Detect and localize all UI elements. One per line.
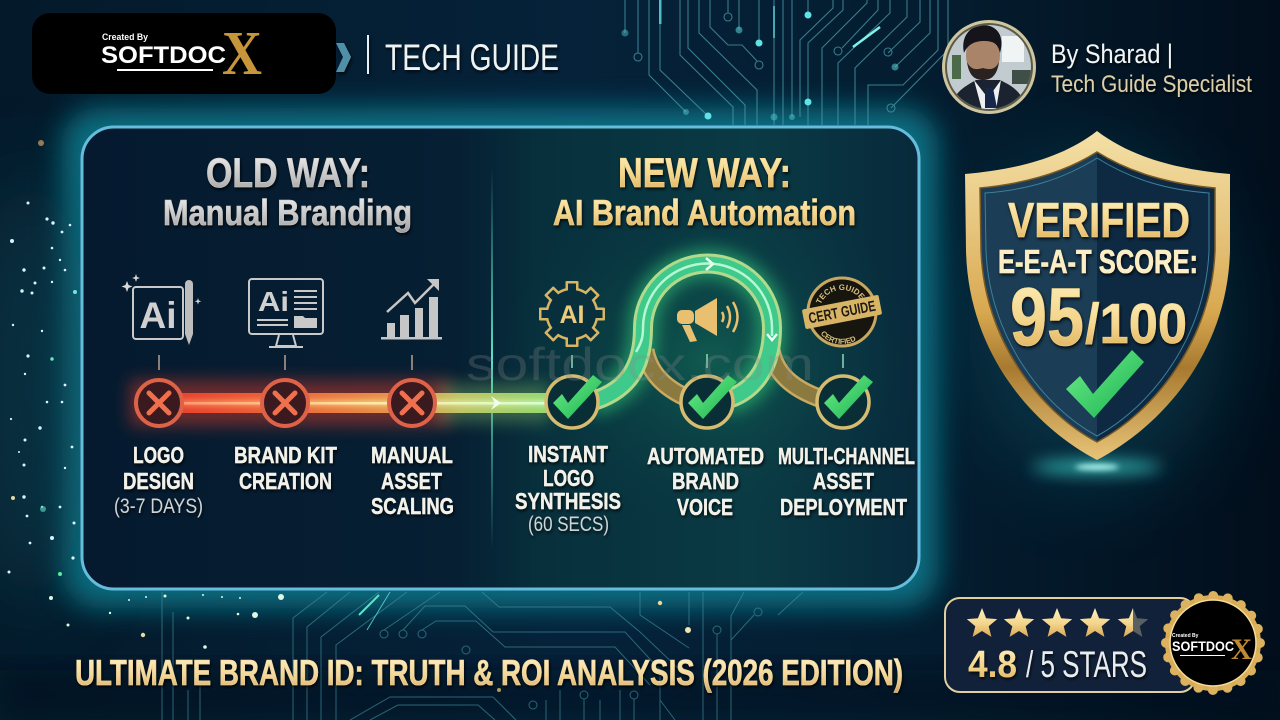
label: instant logo: LOGO [543, 465, 594, 491]
rating box [945, 598, 1195, 692]
logo box: SoftDocX: Created By [102, 32, 148, 42]
header: tech guide [336, 35, 559, 78]
author name [1051, 39, 1252, 98]
label: brand voice [647, 443, 764, 520]
icon: cert badge [802, 276, 882, 348]
heading: old way: Manual Branding [163, 192, 412, 233]
icon: ai logo pencil [122, 274, 201, 345]
label: manual asset [371, 442, 454, 519]
nodes: new way checks [546, 375, 873, 428]
shield text [998, 194, 1198, 363]
label: instant logo: SYNTHESIS [515, 488, 621, 514]
shield check [1066, 350, 1144, 418]
heading: new way: AI Brand Automation [553, 192, 856, 233]
author name: By Sharad | [1051, 39, 1173, 69]
arch: automation loop [590, 258, 825, 402]
label: multi-channel: MULTI-CHANNEL [778, 443, 915, 469]
icon: ai gear [539, 281, 605, 347]
label: logo design: DESIGN [123, 468, 194, 494]
watermark: softdocx.com [466, 338, 814, 390]
heading: new way: NEW WAY: [618, 149, 791, 196]
label: manual asset: MANUAL [371, 442, 453, 468]
sparkles left [8, 140, 77, 576]
label: brand kit: CREATION [239, 468, 332, 494]
label: manual asset: SCALING [371, 493, 454, 519]
stars [967, 608, 1148, 637]
circuit traces top [625, 0, 948, 125]
label: brand kit [234, 442, 337, 494]
circuit traces bottom [162, 592, 803, 720]
icon: megaphone [677, 298, 738, 342]
icon: cert badge: TECH GUIDE [816, 284, 865, 303]
panel: comparison [80, 126, 920, 590]
logo box: SoftDocX [32, 13, 336, 94]
shield text: VERIFIED [1008, 194, 1190, 248]
rating text: 4.8 [968, 644, 1017, 686]
label: brand kit: BRAND KIT [234, 442, 337, 468]
icon: brand kit monitor [249, 279, 323, 347]
heading: old way: OLD WAY: [206, 149, 370, 196]
icon: cert badge: CERT GUIDE [807, 298, 877, 327]
bottom title: ULTIMATE BRAND ID: TRUTH & ROI ANALYSIS (2026 EDITION) [75, 652, 903, 693]
shield text: 95 [1010, 270, 1084, 363]
label: logo design [114, 442, 203, 518]
badge: softdocx seal: SOFTDOC [1172, 639, 1234, 654]
label: manual asset: ASSET [381, 468, 442, 494]
icon: brand kit monitor: Ai [258, 286, 289, 317]
badge: softdocx seal: Created By [1172, 633, 1199, 639]
icon: growth chart [381, 279, 442, 340]
header: tech guide: TECH GUIDE [385, 37, 559, 78]
circuit glow nodes top [622, 0, 898, 120]
label: multi-channel [778, 443, 915, 520]
sparkles bottom [49, 592, 691, 692]
author avatar [942, 20, 1036, 114]
progress bar: red to green [130, 380, 550, 426]
nodes: old way x marks [136, 380, 435, 426]
author name: Tech Guide Specialist [1051, 71, 1252, 98]
label: instant logo: (60 SECS) [528, 513, 609, 536]
label: instant logo [515, 441, 621, 536]
heading: new way [553, 149, 856, 233]
icon: ai gear: AI [560, 301, 584, 329]
label: brand voice: BRAND [672, 468, 739, 494]
heading: old way [163, 149, 412, 233]
badge: softdocx seal: X [1231, 633, 1252, 666]
ticks [159, 354, 843, 370]
logo box: SoftDocX: X [222, 20, 262, 88]
label: brand voice: AUTOMATED [647, 443, 764, 469]
badge: softdocx seal [1165, 595, 1261, 691]
label: multi-channel: ASSET [813, 468, 874, 494]
shield: score [965, 131, 1230, 473]
label: logo design: LOGO [133, 442, 184, 468]
icon: cert badge: CERTIFIED [822, 331, 856, 344]
label: logo design: (3-7 DAYS) [114, 495, 203, 518]
rating text: / 5 STARS [1026, 644, 1147, 685]
icon: ai logo pencil: Ai [140, 295, 176, 336]
label: brand voice: VOICE [677, 494, 733, 520]
rating text [968, 644, 1147, 686]
label: instant logo: INSTANT [528, 441, 608, 467]
logo box: SoftDocX: SOFTDOC [101, 42, 226, 69]
shield text: /100 [1085, 292, 1187, 356]
shield text: E-E-A-T SCORE: [998, 243, 1198, 280]
label: multi-channel: DEPLOYMENT [780, 494, 907, 520]
